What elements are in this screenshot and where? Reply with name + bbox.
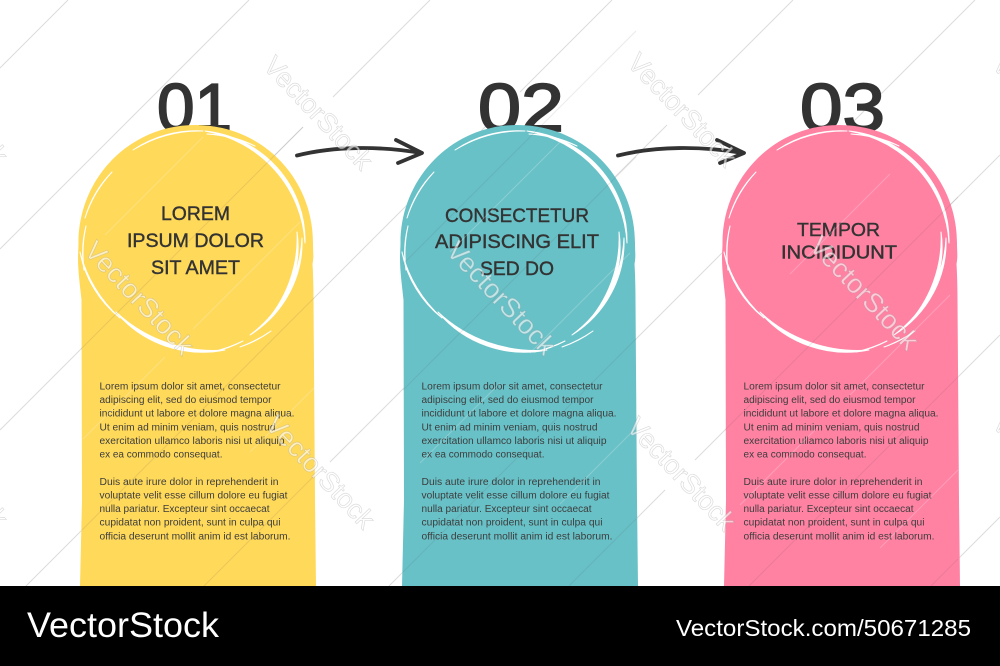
numbers behind the pillars: 02 (478, 70, 564, 146)
arrow: step 1 to step 2 (297, 140, 422, 163)
step 3 body text: officia deserunt mollit anim id est laborum. (744, 531, 934, 542)
step 3 body text: cupidatat non proident, sunt in culpa qui (744, 518, 924, 529)
teal pillar (400, 125, 638, 586)
panel: step 2 (400, 125, 638, 586)
step 1 body text: nulla pariatur. Excepteur sint occaecat (100, 504, 270, 515)
step 3 body text: incididunt ut labore et dolore magna aliqua. (744, 409, 938, 420)
step 2 heading (435, 206, 599, 280)
step 2 body text: Ut enim ad minim veniam, quis nostrud (422, 422, 598, 433)
watermarks: VectorStock (804, 230, 925, 356)
watermarks: VectorStock (260, 409, 381, 535)
step 1 body text: exercitation ullamco laboris nisi ut aliquip (100, 436, 285, 447)
step 3 body text: Duis aute irure dolor in reprehenderit in (744, 477, 922, 488)
step 3 heading: TEMPOR (797, 220, 880, 240)
step 1 heading: SIT AMET (151, 258, 240, 279)
step 1 body text: Ut enim ad minim veniam, quis nostrud (100, 422, 276, 433)
panel: step 3 (722, 125, 960, 586)
hand drawn ring (80, 131, 305, 352)
step 2 body text: incididunt ut labore et dolore magna aliqua. (422, 409, 616, 420)
step 3 heading: INCIDIDUNT (781, 242, 897, 262)
footer bar (0, 586, 1000, 666)
step 1 body text: voluptate velit esse cillum dolore eu fugiat (100, 490, 288, 502)
step 1 body text (100, 382, 294, 542)
yellow pillar (78, 125, 316, 586)
step 1 body text: officia deserunt mollit anim id est laborum. (100, 531, 290, 542)
step 2 body text: Lorem ipsum dolor sit amet, consectetur (422, 382, 603, 392)
step 3 body text: Lorem ipsum dolor sit amet, consectetur (744, 382, 925, 392)
numbers behind the pillars: 01 (157, 70, 232, 146)
step 3 body text: adipiscing elit, sed do eiusmod tempor (744, 395, 916, 406)
watermarks: VectorStock (441, 235, 562, 361)
step 2 body text: adipiscing elit, sed do eiusmod tempor (422, 395, 594, 406)
step 2 body text: ex ea commodo consequat. (422, 450, 544, 460)
step 2 body text: exercitation ullamco laboris nisi ut aliquip (422, 436, 607, 447)
step 3 body text (744, 382, 938, 542)
watermarks: VectorStock (79, 235, 200, 361)
step 2 heading: CONSECTETUR (445, 206, 589, 227)
step 3 body text: ex ea commodo consequat. (744, 450, 866, 460)
step 3 body text: exercitation ullamco laboris nisi ut aliquip (744, 436, 929, 447)
step 2 body text: cupidatat non proident, sunt in culpa qui (422, 518, 602, 529)
hand drawn ring (724, 131, 949, 352)
step 3 body text: nulla pariatur. Excepteur sint occaecat (744, 504, 914, 515)
step 2 body text: Duis aute irure dolor in reprehenderit in (422, 477, 600, 488)
step 3 body text: voluptate velit esse cillum dolore eu fugiat (744, 490, 932, 502)
pink pillar (722, 125, 960, 586)
arrow: step 2 to step 3 (618, 140, 744, 163)
step 2 heading: SED DO (480, 259, 554, 280)
panel: step 1 (78, 125, 316, 586)
footer logo: VectorStock (27, 606, 220, 645)
step 1 body text: adipiscing elit, sed do eiusmod tempor (100, 395, 272, 406)
step 3 body text: Ut enim ad minim veniam, quis nostrud (744, 422, 920, 433)
step 1 body text: ex ea commodo consequat. (100, 450, 222, 460)
diagonal lines over the pillars (81, 31, 958, 586)
numbers behind the pillars (157, 70, 885, 146)
step 1 body text: cupidatat non proident, sunt in culpa qui (100, 518, 280, 529)
step 2 body text: voluptate velit esse cillum dolore eu fugiat (422, 490, 610, 502)
watermarks: VectorStock (258, 50, 379, 176)
step 2 heading: ADIPISCING ELIT (435, 232, 599, 253)
step 1 body text: Duis aute irure dolor in reprehenderit in (100, 477, 278, 488)
watermarks: VectorStock (622, 47, 743, 173)
step 2 body text: officia deserunt mollit anim id est laborum. (422, 531, 612, 542)
step 1 body text: incididunt ut labore et dolore magna aliqua. (100, 409, 294, 420)
watermarks: VectorStock (621, 411, 742, 537)
numbers behind the pillars: 03 (800, 70, 885, 146)
step 2 body text: nulla pariatur. Excepteur sint occaecat (422, 504, 592, 515)
step 2 body text (422, 382, 616, 542)
step 1 heading: LOREM (161, 204, 230, 225)
hand drawn ring (402, 131, 627, 352)
step 1 heading (127, 204, 264, 279)
step 3 heading (781, 220, 897, 262)
step 1 body text: Lorem ipsum dolor sit amet, consectetur (100, 382, 281, 392)
footer image id: VectorStock.com/50671285 (676, 615, 971, 641)
step 1 heading: IPSUM DOLOR (127, 231, 264, 252)
watermarks (0, 45, 1000, 537)
